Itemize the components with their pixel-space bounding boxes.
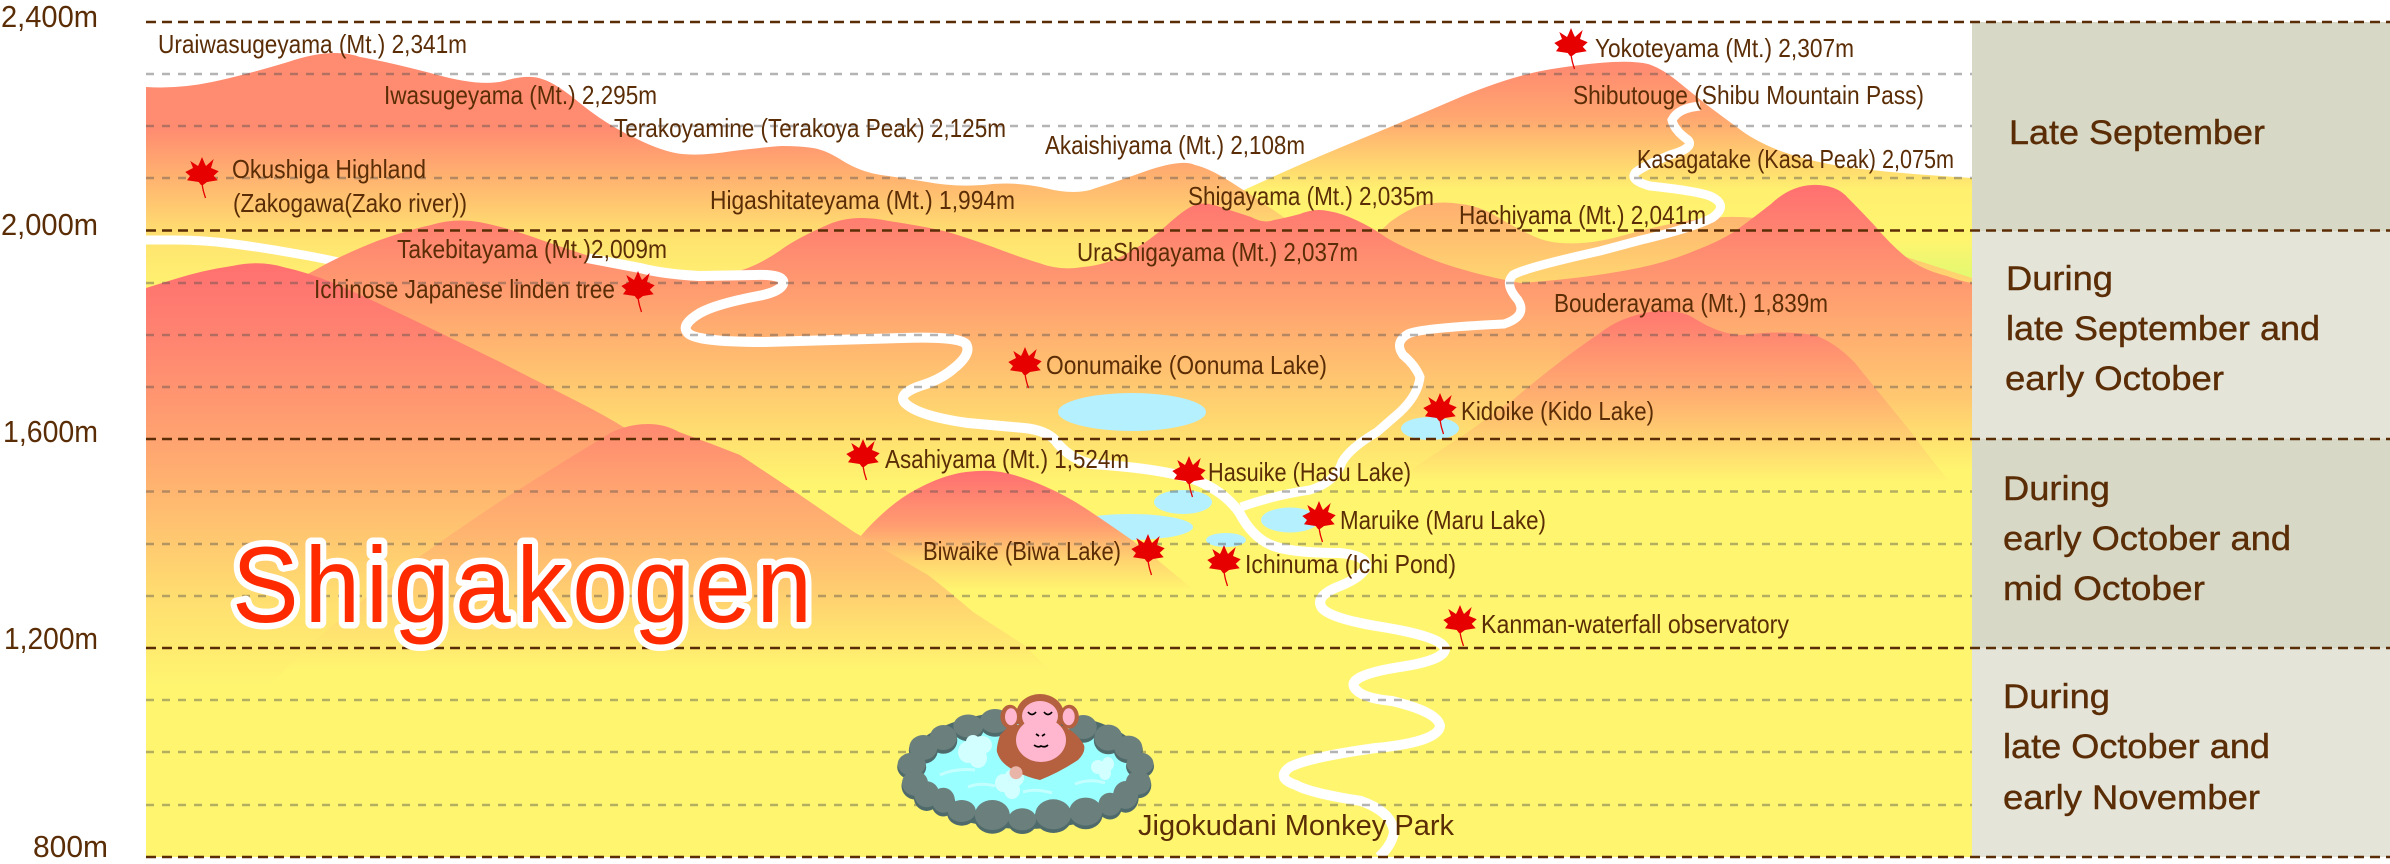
icon: maple leaf Maruike	[1302, 501, 1336, 542]
mountain: Asahiyama	[840, 471, 1230, 620]
icon: maple leaf Okushiga	[185, 157, 219, 198]
label: Takebitayama: Takebitayama (Mt.)2,009m	[397, 234, 667, 264]
label: Hasuike: Hasuike (Hasu Lake)	[1208, 457, 1411, 487]
label: Hachiyama: Hachiyama (Mt.) 2,041m	[1459, 200, 1706, 230]
road: main route from Shiga highland to Jigokudani	[587, 258, 1445, 857]
panel: late September and early October: early October	[2005, 360, 2224, 398]
label: Terakoyamine: Terakoyamine (Terakoya Peak) 2,125m	[614, 113, 1006, 143]
icon: maple leaf Yokoteyama	[1554, 28, 1588, 69]
label: Iwasugeyama: Iwasugeyama (Mt.) 2,295m	[384, 80, 657, 110]
altitude axis labels: 1,600m	[3, 414, 98, 449]
label: Okushiga Highland: (Zakogawa(Zako river))	[233, 188, 467, 218]
road: upper left section behind Takebitayama	[146, 240, 350, 265]
mountain: front centre peak	[270, 424, 1070, 690]
label: Maruike: Maruike (Maru Lake)	[1340, 505, 1546, 535]
lakes	[1058, 393, 1459, 547]
label: Shigayama: Shigayama (Mt.) 2,035m	[1188, 181, 1434, 211]
panel: early October and mid October: early October and	[2003, 520, 2291, 558]
icon: maple leaf Biwaike	[1131, 534, 1165, 575]
icon: maple leaf Asahiyama	[846, 439, 880, 480]
mountain range: Yokoteyama ridge	[1244, 62, 1972, 300]
altitude axis labels: 2,000m	[1, 207, 98, 242]
label: Bouderayama: Bouderayama (Mt.) 1,839m	[1554, 288, 1828, 318]
hot spring water	[921, 724, 1133, 816]
label: Kasagatake: Kasagatake (Kasa Peak) 2,075m	[1637, 144, 1954, 174]
title: Shigakogen: Shigakogen	[232, 525, 812, 646]
label: Kidoike: Kidoike (Kido Lake)	[1461, 396, 1654, 426]
label: Asahiyama: Asahiyama (Mt.) 1,524m	[885, 444, 1129, 474]
label: Uraiwasugeyama: Uraiwasugeyama (Mt.) 2,341m	[158, 29, 467, 59]
panel: late September and early October: During	[2006, 260, 2113, 298]
monkey	[997, 694, 1084, 780]
label: Biwaike: Biwaike (Biwa Lake)	[923, 536, 1121, 566]
icon: maple leaf Kidoike	[1423, 393, 1457, 434]
steam clouds	[958, 735, 1114, 799]
label: Shibutouge: Shibutouge (Shibu Mountain Pass)	[1573, 80, 1924, 110]
label: Ichinuma: Ichinuma (Ichi Pond)	[1245, 549, 1456, 579]
altitude axis labels: 2,400m	[1, 0, 98, 34]
panel: early October and mid October: During	[2003, 470, 2110, 508]
altitude axis labels	[1, 0, 108, 864]
mountain: Hachiyama ridge	[1371, 202, 1972, 420]
label: Ichinose Japanese linden tree: Ichinose Japanese linden tree	[314, 274, 615, 304]
mountain range: Takebitayama, Higashitateyama and UraShigayama	[306, 204, 1560, 500]
icon: maple leaf Ichinuma	[1207, 545, 1241, 586]
panel: Late September	[1972, 22, 2390, 231]
panel: late September and early October	[1972, 231, 2390, 439]
water ripples	[940, 770, 1105, 793]
panel: early October and mid October	[1972, 439, 2390, 648]
mountain: red peak on the right	[1499, 185, 1972, 500]
icon: maple leaf Ichinose	[621, 271, 655, 312]
label: Akaishiyama: Akaishiyama (Mt.) 2,108m	[1045, 130, 1305, 160]
rock ring base	[914, 720, 1138, 820]
road: branch to Shibutouge pass	[1241, 106, 1721, 507]
mountain range: Uraiwasugeyama ridge	[146, 53, 1285, 500]
icon: maple leaf Kanman	[1443, 605, 1477, 646]
mountain: Bouderayama	[1412, 311, 1957, 490]
ground background	[146, 290, 1972, 857]
panel: late October and early November: early November	[2003, 779, 2260, 817]
label: Kanman-waterfall observatory: Kanman-waterfall observatory	[1481, 609, 1789, 639]
mountain: front left red ridge	[146, 263, 760, 700]
panel: late October and early November: late October and	[2003, 728, 2270, 766]
panel: late October and early November: During	[2003, 678, 2110, 716]
label: Higashitateyama: Higashitateyama (Mt.) 1,994m	[710, 185, 1015, 215]
icon: onsen with bathing snow monkey	[897, 694, 1154, 834]
icon: maple leaf Hasuike	[1172, 456, 1206, 497]
panel: late September and early October: late September and	[2006, 310, 2320, 348]
label: Jigokudani Monkey Park: Jigokudani Monkey Park	[1138, 810, 1454, 842]
panel: late October and early November	[1972, 648, 2390, 857]
icon: maple leaf Oonumaike	[1008, 347, 1042, 388]
altitude axis labels: 1,200m	[4, 621, 98, 656]
label: Yokoteyama: Yokoteyama (Mt.) 2,307m	[1595, 33, 1854, 63]
label: Okushiga Highland: Okushiga Highland	[232, 154, 426, 184]
panel: early October and mid October: mid October	[2003, 570, 2205, 608]
rocks around the pool	[897, 709, 1154, 834]
panel: Late September: Late September	[2009, 114, 2265, 152]
altitude axis labels: 800m	[33, 829, 108, 864]
label: Okushiga Highland	[232, 154, 467, 218]
label: Oonumaike: Oonumaike (Oonuma Lake)	[1046, 350, 1327, 380]
label: UraShigayama: UraShigayama (Mt.) 2,037m	[1077, 237, 1358, 267]
